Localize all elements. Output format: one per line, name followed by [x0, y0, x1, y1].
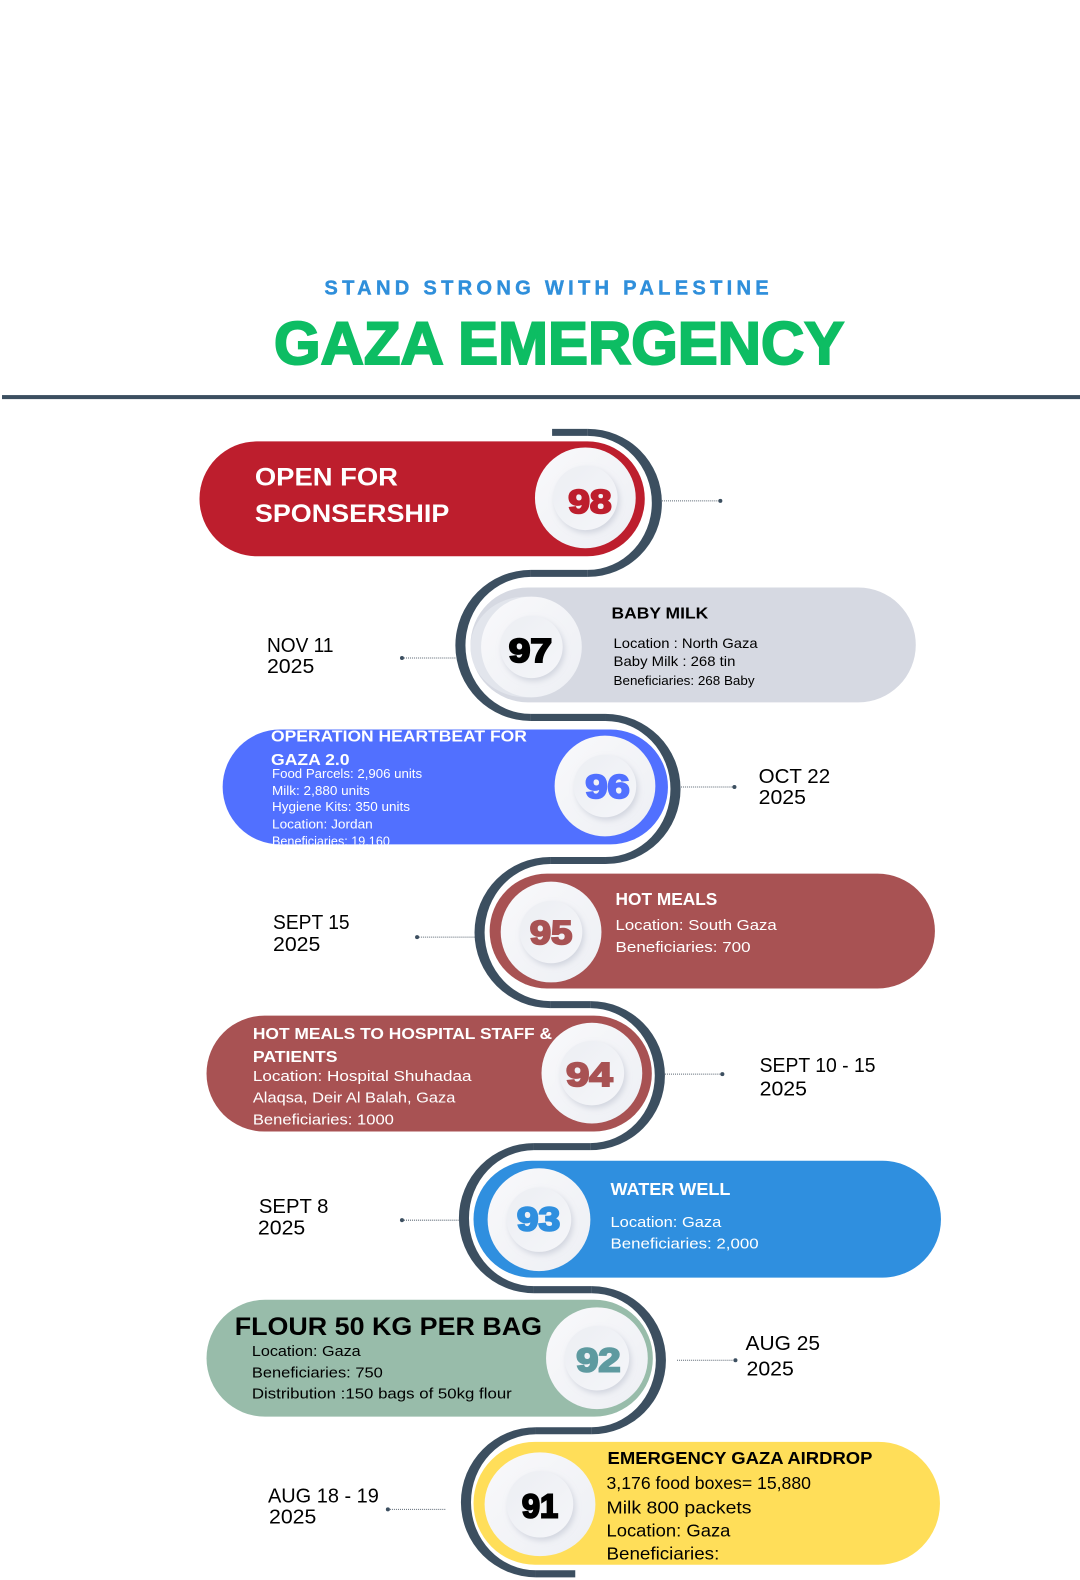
panel: pill 91: [474, 1442, 940, 1565]
text: emergency airdrop: [606, 1449, 872, 1564]
connector 96: [681, 785, 736, 789]
text: emergency airdrop: Beneficiaries:: [606, 1545, 719, 1564]
date: nov 11: 2025: [267, 656, 314, 678]
text: operation heartbeat: Location: Jordan: [272, 816, 373, 831]
text: emergency airdrop: Milk 800 packets: [606, 1498, 752, 1517]
number badge 95: [501, 882, 601, 982]
panel: pill 93: [474, 1161, 941, 1278]
panel: pill 94: [207, 1016, 652, 1132]
connector 94: [665, 1072, 724, 1076]
text: flour: Distribution :150 bags of 50kg flour: [252, 1386, 512, 1403]
date: aug 18-19: [268, 1485, 379, 1528]
serpentine timeline path: [455, 429, 681, 1577]
date: sept 15: 2025: [273, 934, 320, 956]
date: sept 10-15: SEPT 10 - 15: [760, 1055, 875, 1077]
connector 98: [662, 499, 722, 503]
number badge 93: 93: [517, 1201, 560, 1238]
text: hot meals: Beneficiaries: 700: [616, 939, 751, 956]
text: hot meals to hospital: PATIENTS: [253, 1048, 338, 1066]
text: operation heartbeat: Food Parcels: 2,906 units: [272, 766, 423, 781]
number badge 92: 92: [576, 1342, 621, 1379]
panel: pill 96: [223, 728, 668, 848]
text: hot meals to hospital: Location: Hospital Shuhadaa: [253, 1068, 472, 1085]
date: aug 25: AUG 25: [746, 1333, 820, 1355]
text: hot meals: [616, 890, 777, 956]
text: baby milk: Location : North Gaza: [614, 636, 758, 651]
header rule: [2, 395, 1080, 399]
date: oct 22: [759, 766, 830, 809]
connector 92: [677, 1358, 737, 1362]
date: nov 11: [267, 635, 333, 678]
text: baby milk: BABY MILK: [612, 605, 709, 623]
title: GAZA EMERGENCY: [274, 309, 844, 377]
date: sept 10-15: 2025: [760, 1078, 807, 1100]
connector 97: [400, 656, 455, 660]
date: aug 18-19: AUG 18 - 19: [268, 1485, 379, 1507]
panel: pill 98: [199, 441, 645, 556]
date: sept 15: SEPT 15: [273, 912, 350, 934]
date: sept 8: SEPT 8: [259, 1196, 328, 1218]
text: emergency airdrop: 3,176 food boxes= 15,880: [606, 1474, 811, 1493]
number badge 91: 91: [522, 1488, 558, 1525]
heading: open for sponsorship: OPEN FOR: [255, 464, 398, 492]
connector 95: [415, 935, 476, 939]
text: water well: Location: Gaza: [611, 1214, 722, 1231]
date: sept 10-15: [760, 1055, 875, 1100]
text: operation heartbeat: [271, 728, 527, 848]
date: aug 18-19: 2025: [269, 1506, 316, 1528]
text: hot meals to hospital: [253, 1025, 552, 1128]
heading: open for sponsorship: SPONSERSHIP: [255, 500, 449, 528]
date: oct 22: OCT 22: [759, 766, 830, 788]
text: emergency airdrop: EMERGENCY GAZA AIRDROP: [608, 1449, 872, 1468]
text: operation heartbeat: GAZA 2.0: [271, 751, 350, 769]
date: aug 25: [746, 1333, 820, 1380]
number badge 97: [470, 597, 582, 697]
date: oct 22: 2025: [759, 787, 806, 809]
text: baby milk: Beneficiaries: 268 Baby: [614, 674, 755, 688]
text: operation heartbeat: OPERATION HEARTBEAT FOR: [271, 728, 527, 746]
panel: pill 92: [207, 1300, 653, 1417]
number badge 98: [535, 447, 636, 548]
text: water well: WATER WELL: [611, 1180, 730, 1199]
date: aug 25: 2025: [747, 1358, 794, 1380]
text: operation heartbeat: Beneficiaries: 19,160: [272, 833, 390, 848]
text: flour: Location: Gaza: [252, 1343, 361, 1360]
text: water well: Beneficiaries: 2,000: [611, 1235, 759, 1252]
text: hot meals to hospital: Beneficiaries: 1000: [253, 1111, 394, 1128]
number badge 93: [488, 1168, 590, 1271]
text: emergency airdrop: Location: Gaza: [606, 1522, 731, 1541]
text: water well: [611, 1180, 759, 1252]
number badge 91: [485, 1452, 595, 1556]
number badge 94: [542, 1023, 642, 1123]
number badge 97: 97: [509, 633, 552, 670]
connector 91: [386, 1507, 446, 1511]
number badge 96: 96: [585, 769, 630, 806]
text: flour: FLOUR 50 KG PER BAG: [235, 1313, 542, 1341]
text: flour: Beneficiaries: 750: [252, 1364, 383, 1381]
number badge 94: 94: [566, 1057, 613, 1094]
number badge 95: 95: [530, 915, 572, 952]
date: sept 15: [273, 912, 350, 956]
text: baby milk: [612, 605, 758, 688]
text: baby milk: Baby Milk : 268 tin: [614, 654, 735, 669]
text: hot meals to hospital: Alaqsa, Deir Al Balah, Gaza: [253, 1089, 456, 1106]
connector 93: [400, 1218, 459, 1222]
text: hot meals: Location: South Gaza: [616, 917, 777, 934]
number badge 98: 98: [568, 484, 612, 521]
subtitle: STAND STRONG WITH PALESTINE: [324, 277, 769, 299]
text: hot meals to hospital: HOT MEALS TO HOSPITAL STAFF &: [253, 1025, 552, 1043]
panel: pill 97: [470, 588, 916, 702]
text: operation heartbeat: Hygiene Kits: 350 units: [272, 799, 411, 814]
date: sept 8: [258, 1196, 328, 1239]
panel: pill 95: [490, 874, 935, 988]
text: operation heartbeat: Milk: 2,880 units: [272, 783, 370, 798]
heading: open for sponsorship: [255, 464, 449, 528]
number badge 96: [555, 736, 655, 836]
date: nov 11: NOV 11: [267, 635, 333, 657]
date: sept 8: 2025: [258, 1217, 305, 1239]
text: flour: [235, 1313, 542, 1403]
number badge 92: [546, 1307, 648, 1409]
text: hot meals: HOT MEALS: [616, 890, 717, 909]
